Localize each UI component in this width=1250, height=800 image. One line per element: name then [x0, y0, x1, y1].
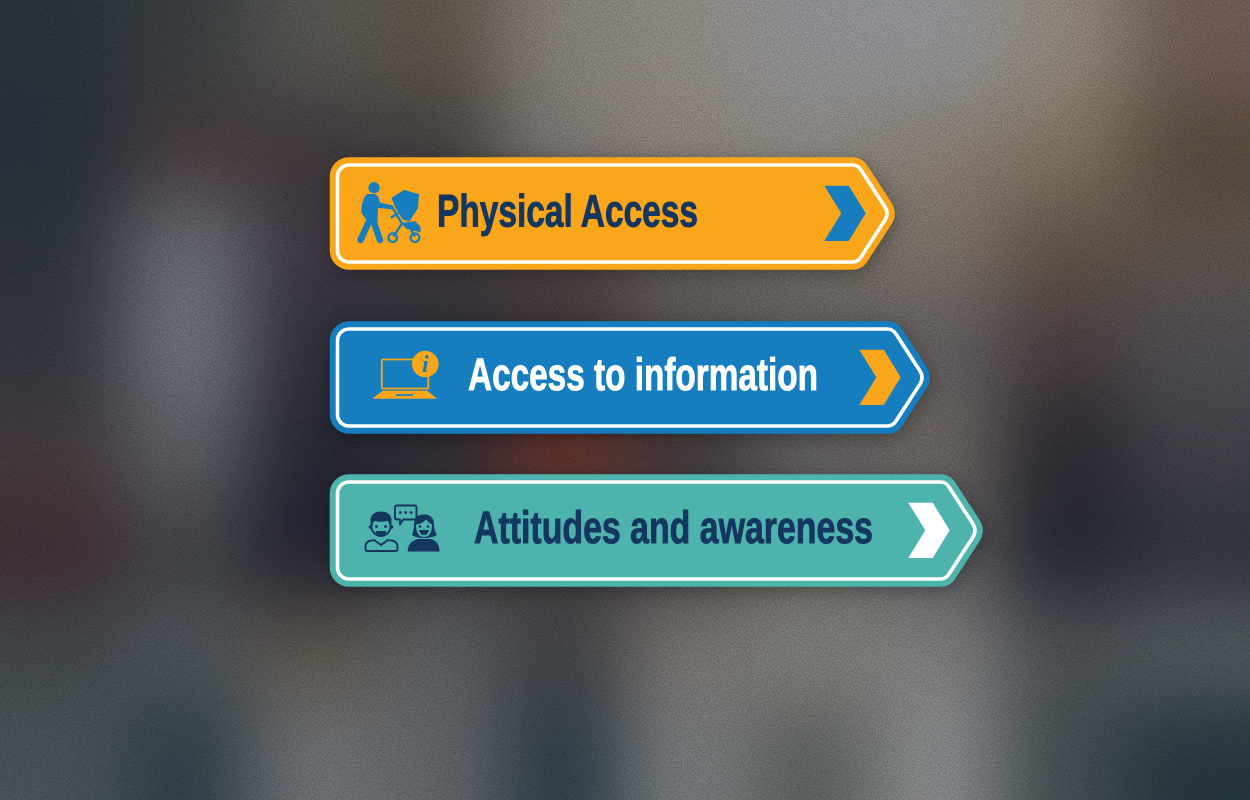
label: Physical Access [437, 186, 698, 236]
icon: person pushing stroller [360, 182, 420, 242]
chevron [824, 186, 866, 241]
badge: Access to information [338, 329, 922, 426]
icon: two people talking [366, 506, 440, 552]
badge shape [338, 482, 975, 579]
badge shape [338, 165, 887, 262]
badge shape [338, 329, 922, 426]
badge: Physical Access [338, 165, 887, 262]
chevron [859, 350, 901, 405]
icon: laptop with info badge: i [422, 352, 429, 378]
icon: laptop with info badge [373, 351, 439, 398]
label: Attitudes and awareness [474, 502, 873, 553]
label: Access to information [468, 349, 818, 400]
badge: Attitudes and awareness [338, 482, 975, 579]
chevron [908, 503, 950, 558]
